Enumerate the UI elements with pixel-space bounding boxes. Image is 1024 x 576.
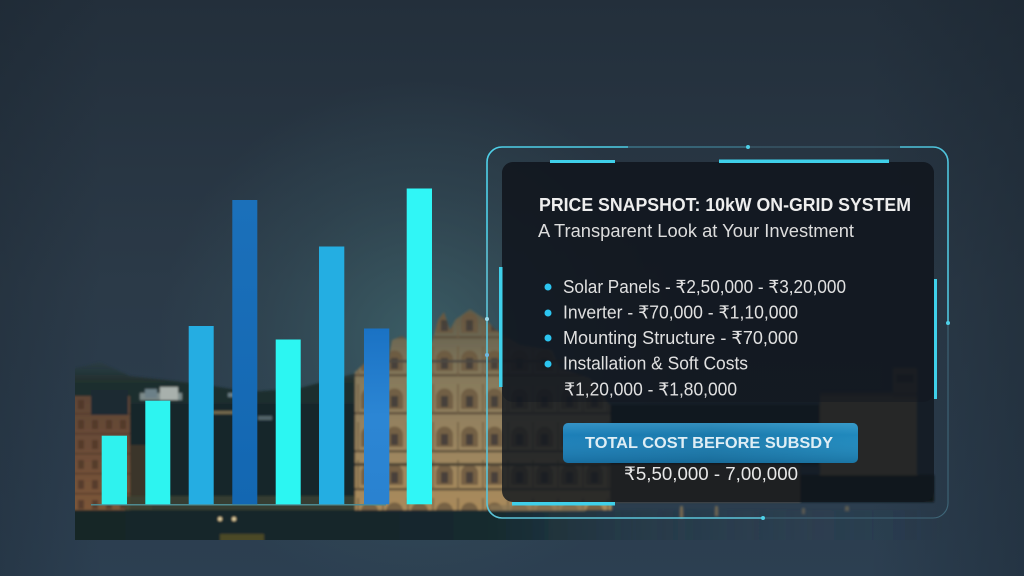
cost list <box>544 277 846 400</box>
total cost button: TOTAL COST BEFORE SUBSDY <box>585 435 833 452</box>
panel frame <box>485 145 950 520</box>
item: installation and soft costs <box>544 354 748 400</box>
bar 3 <box>189 326 214 504</box>
bar 6 <box>319 246 344 504</box>
middle town behind panel <box>612 419 936 504</box>
bar 8 <box>407 188 432 504</box>
item: inverter: Inverter - ₹70,000 - ₹1,10,000 <box>563 302 798 322</box>
total cost button <box>563 423 858 463</box>
item: mounting structure: Mounting Structure - ₹70,000 <box>563 328 798 348</box>
bar 4 <box>232 200 257 504</box>
left brown buildings <box>75 394 151 512</box>
panel: price snapshot card <box>502 162 934 502</box>
Hawa Mahal facade <box>355 309 612 510</box>
bar 7 <box>364 328 389 504</box>
dark trees in centre <box>125 404 360 510</box>
bar 1 <box>102 436 127 504</box>
distant hills <box>75 364 356 405</box>
item: installation and soft costs: Installation & Soft Costs <box>563 354 748 374</box>
heading: PRICE SNAPSHOT: 10kW ON-GRID SYSTEM <box>539 194 911 215</box>
right palace <box>820 368 917 475</box>
bar 5 <box>276 340 301 504</box>
street lights <box>218 505 849 542</box>
baseline <box>91 504 386 506</box>
centre lights <box>125 393 360 510</box>
item: solar panels: Solar Panels - ₹2,50,000 - ₹3,20,000 <box>563 277 846 297</box>
dark foreground ground <box>75 508 638 540</box>
subheading: A Transparent Look at Your Investment <box>538 220 854 241</box>
white lit palace on hill <box>140 387 182 400</box>
bar 2 <box>145 401 170 504</box>
cityscape photo band <box>60 309 960 544</box>
item: installation and soft costs: ₹1,20,000 - ₹1,80,000 <box>564 380 737 400</box>
bar chart <box>91 188 432 506</box>
total cost value: ₹5,50,000 - 7,00,000 <box>624 463 798 484</box>
frame accent bars <box>499 160 937 506</box>
